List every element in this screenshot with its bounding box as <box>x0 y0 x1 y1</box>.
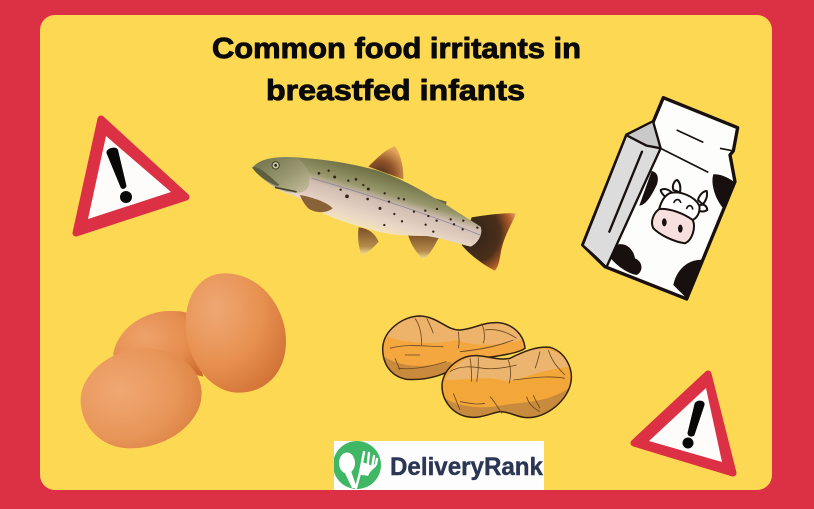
back egg <box>113 311 203 377</box>
lower fins <box>358 227 379 255</box>
tail fin <box>462 213 516 271</box>
lateral line <box>312 178 480 235</box>
icon: fish <box>252 147 516 271</box>
icon: eggs <box>81 273 286 448</box>
spots <box>318 169 478 233</box>
peanut front <box>440 347 573 423</box>
icon: warning triangle left <box>76 119 186 233</box>
side panel <box>584 122 661 265</box>
logo wordmark: DeliveryRank <box>390 453 543 481</box>
title <box>212 33 581 107</box>
cow spots <box>639 171 658 206</box>
icon: warning triangle right <box>634 374 733 473</box>
front egg <box>81 348 202 448</box>
body <box>253 157 481 247</box>
pectoral fin <box>300 195 333 212</box>
peanut back <box>382 315 526 380</box>
head <box>253 157 309 193</box>
icon: peanuts <box>380 313 573 423</box>
icon: milk carton <box>583 98 738 299</box>
right egg <box>186 273 286 393</box>
title: Common food irritants in <box>212 33 581 65</box>
cow face <box>652 180 707 243</box>
dorsal fin <box>368 147 403 179</box>
logo mark: spoon and fork <box>333 441 381 489</box>
logo: DeliveryRank <box>333 441 544 490</box>
title: breastfed infants <box>266 75 525 107</box>
